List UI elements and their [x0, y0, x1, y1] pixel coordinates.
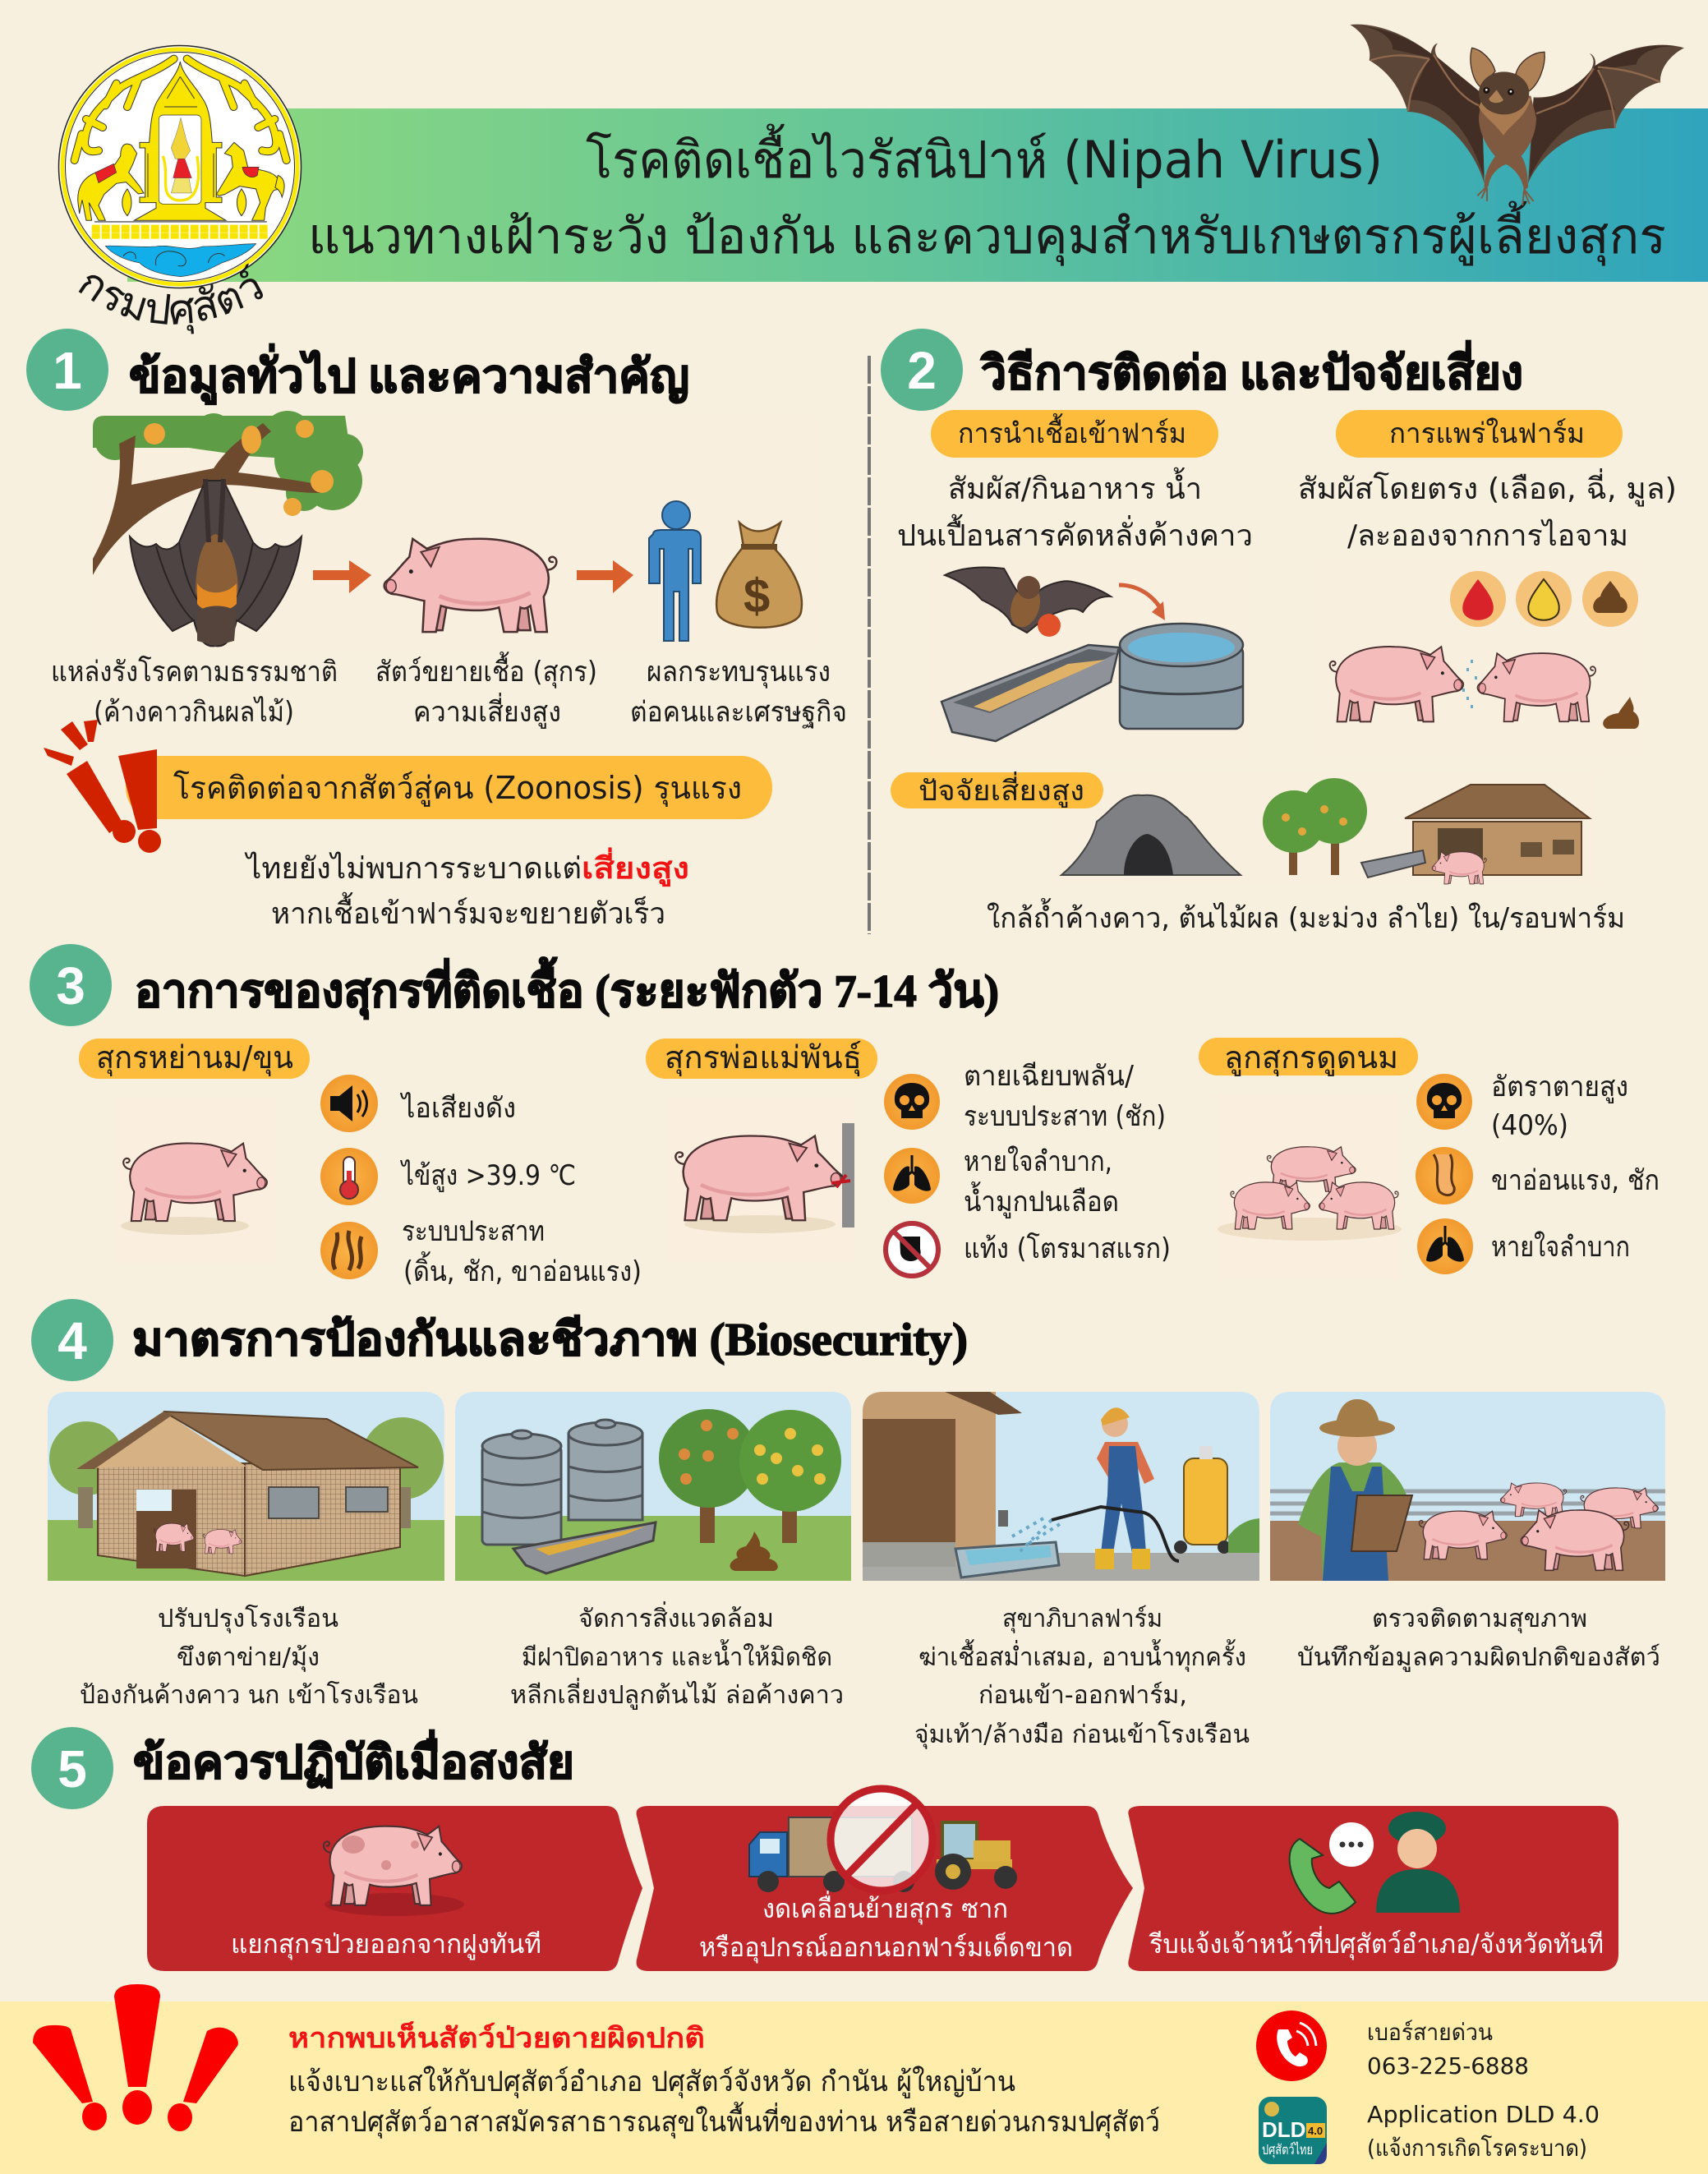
icon: red exclamation marks	[44, 720, 161, 853]
symptom list: ระบบประสาท (ชัก)	[964, 1100, 1166, 1133]
icon: thermometer	[320, 1148, 378, 1205]
icon: DLD 4.0 app	[1259, 2097, 1327, 2164]
section 2 heading: วิธีการติดต่อ และปัจจัยเสี่ยง	[980, 340, 1523, 399]
step text	[699, 1891, 1073, 1964]
captions: biosecurity measures: ขึงตาข่าย/มุ้ง	[177, 1643, 320, 1673]
title line 2: แนวทางเฝ้าระวัง ป้องกัน และควบคุมสำหรับเกษตรกรผู้เลี้ยงสุกร	[308, 200, 1666, 266]
icon: officer	[1376, 1812, 1460, 1913]
symptom list	[964, 1060, 1171, 1265]
pig right	[1478, 653, 1595, 721]
text block: introduction routes: ปนเปื้อนสารคัดหลั่งค้างคาว	[897, 514, 1253, 553]
alert body	[288, 2066, 1160, 2139]
symptom list: ไข้สูง >39.9 ℃	[399, 1159, 576, 1192]
captions: transmission chain: สัตว์ขยายเชื้อ (สุกร)	[375, 652, 597, 689]
app text: Application DLD 4.0	[1367, 2101, 1600, 2128]
panel: weaned and fattening pigs	[79, 1039, 642, 1288]
section 2 number badge: 2	[907, 341, 937, 400]
section 3 number badge: 3	[56, 956, 85, 1016]
symptom list: (40%)	[1491, 1109, 1568, 1142]
icon: no pregnancy	[886, 1223, 938, 1276]
alert body: อาสาปศุสัตว์อาสาสมัครสาธารณสุขในพื้นที่ของท่าน หรือสายด่วนกรมปศุสัตว์	[288, 2102, 1160, 2139]
icon: feces	[1582, 571, 1638, 627]
arrow	[577, 560, 633, 593]
header band	[127, 108, 1708, 282]
icon: DLD 4.0 app: DLD	[1262, 2117, 1305, 2142]
symptom list: ขาอ่อนแรง, ชัก	[1491, 1164, 1660, 1197]
section 4 heading: มาตรการป้องกันและชีวภาพ (Biosecurity)	[132, 1315, 968, 1366]
title line 1: โรคติดเชื้อไวรัสนิปาห์ (Nipah Virus)	[586, 123, 1383, 190]
alert body: แจ้งเบาะแสให้กับปศุสัตว์อำเภอ ปศุสัตว์จังหวัด กำนัน ผู้ใหญ่บ้าน	[288, 2066, 1015, 2098]
hotline text: 063-225-6888	[1367, 2052, 1529, 2080]
captions: transmission chain: ผลกระทบรุนแรง	[647, 656, 831, 689]
text block: risk status: เสี่ยงสูง	[582, 847, 689, 887]
bat	[945, 567, 1111, 637]
icon: exclamation marks	[33, 1984, 238, 2131]
symptom list: หายใจลำบาก,	[964, 1145, 1112, 1178]
fruit trees	[1263, 778, 1367, 875]
section 4 number badge	[31, 1299, 113, 1381]
icon: person	[649, 501, 701, 641]
icon: money bag: $	[744, 569, 770, 623]
icon: money bag	[716, 523, 802, 628]
captions: transmission chain: แหล่งรังโรคตามธรรมชาติ	[51, 656, 338, 689]
label pill: spread in farm	[1336, 410, 1623, 458]
icon: speaker	[320, 1075, 378, 1132]
farm house	[1405, 785, 1590, 875]
text block: risk locations: ใกล้ถ้ำค้างคาว, ต้นไม้ผล (มะม่วง ลำไย) ใน/รอบฟาร์ม	[987, 898, 1625, 935]
icon: phone	[1290, 1839, 1356, 1914]
icon: truck	[749, 1817, 914, 1892]
text block: risk status: หากเชื้อเข้าฟาร์มจะขยายตัวเร็ว	[271, 891, 665, 931]
sprayer tank	[1174, 1446, 1231, 1554]
icon: urine drop	[1516, 571, 1572, 627]
icon: skull	[1416, 1074, 1472, 1130]
icon: prohibition sign	[831, 1789, 932, 1891]
captions: biosecurity measures: สุขาภิบาลฟาร์ม	[1002, 1605, 1162, 1634]
fruit trees	[659, 1409, 841, 1543]
icon: blood drop	[1450, 571, 1506, 627]
symptom list	[1491, 1071, 1660, 1264]
captions: biosecurity measures	[80, 1601, 1660, 1750]
captions: biosecurity measures: ป้องกันค้างคาว นก เข้าโรงเรือน	[80, 1680, 418, 1710]
icon: sick pig	[324, 1826, 464, 1916]
label pill: สุกรพ่อแม่พันธุ์	[665, 1039, 862, 1076]
symptom list: แท้ง (โตรมาสแรก)	[964, 1232, 1171, 1265]
icon: pig	[384, 539, 556, 632]
text block: introduction routes	[897, 467, 1253, 553]
step text: รีบแจ้งเจ้าหน้าที่ปศุสัตว์อำเภอ/จังหวัดทันที	[1149, 1926, 1604, 1960]
tree with fruit	[93, 411, 363, 575]
icon: lungs	[1417, 1218, 1473, 1274]
captions: biosecurity measures: ปรับปรุงโรงเรือน	[158, 1604, 338, 1634]
label pill: introduction into farm: การนำเชื้อเข้าฟาร์ม	[958, 413, 1186, 450]
icon: DLD 4.0 app: ปศุสัตว์ไทย	[1262, 2141, 1313, 2158]
captions: biosecurity measures: หลีกเลี่ยงปลูกต้นไม้ ล่อค้างคาว	[510, 1678, 844, 1710]
symptom list: อัตราตายสูง	[1491, 1071, 1628, 1103]
icon: pig	[123, 1143, 267, 1221]
house	[76, 1412, 418, 1576]
building and door	[863, 1392, 1022, 1567]
wall	[842, 1123, 854, 1227]
label pill: สุกรหย่านม/ขุน	[96, 1039, 293, 1076]
illustration: bat contaminating feed and water	[927, 557, 1253, 758]
illustration: cave, fruit trees and farm	[1054, 771, 1598, 885]
alert heading: หากพบเห็นสัตว์ป่วยตายผิดปกติ	[288, 2020, 705, 2055]
captions: biosecurity measures: จุ่มเท้า/ล้างมือ ก่อนเข้าโรงเรือน	[914, 1720, 1250, 1750]
covered tanks	[482, 1420, 642, 1545]
section 3 number badge	[30, 944, 112, 1026]
worker with sprayer	[1052, 1407, 1179, 1569]
icon: sow with nasal bleeding	[675, 1135, 850, 1220]
section 1 heading: ข้อมูลทั่วไป และความสำคัญ	[129, 343, 689, 405]
foot bath	[955, 1542, 1059, 1578]
icon: hotline phone	[1256, 2010, 1327, 2081]
icon: lungs	[884, 1148, 940, 1204]
text block: risk status: ไทยยังไม่พบการระบาดแต่	[244, 851, 582, 886]
captions: transmission chain	[51, 652, 847, 729]
captions: transmission chain: ความเสี่ยงสูง	[413, 693, 561, 729]
section 1 number badge: 1	[53, 341, 82, 400]
captions: biosecurity measures: ตรวจติดตามสุขภาพ	[1372, 1605, 1587, 1634]
section 5 number badge: 5	[58, 1739, 87, 1799]
symptom list: ระบบประสาท	[402, 1215, 545, 1248]
captions: biosecurity measures: จัดการสิ่งแวดล้อม	[578, 1601, 774, 1633]
symptom list: ไอเสียงดัง	[399, 1092, 516, 1125]
symptom list: น้ำมูกปนเลือด	[964, 1181, 1119, 1218]
panel: suckling piglets	[1199, 1038, 1660, 1280]
text block: spread routes	[1298, 468, 1677, 553]
icon: nervous signs	[320, 1222, 378, 1279]
captions: transmission chain: (ค้างคาวกินผลไม้)	[94, 696, 294, 729]
icon: DLD 4.0 app: 4.0	[1308, 2125, 1323, 2137]
farmer	[1298, 1399, 1412, 1581]
water tank	[1120, 624, 1243, 729]
hotline text: เบอร์สายด่วน	[1367, 2019, 1493, 2046]
step 2: stop movement	[637, 1789, 1133, 1971]
label pill: spread in farm: การแพร่ในฟาร์ม	[1389, 417, 1585, 450]
section 3 heading: อาการของสุกรที่ติดเชื้อ (ระยะฟักตัว 7-14 วัน)	[135, 957, 999, 1020]
cave	[1061, 795, 1241, 875]
app text: (แจ้งการเกิดโรคระบาด)	[1367, 2135, 1587, 2162]
icon: hanging fruit bat	[130, 479, 302, 646]
app text	[1367, 2101, 1600, 2162]
step 3: notify officials	[1128, 1806, 1618, 1971]
text block: risk status	[244, 847, 689, 931]
icon: piglets	[1231, 1147, 1398, 1229]
panel: breeding pigs	[646, 1039, 1171, 1276]
captions: biosecurity measures: ก่อนเข้า-ออกฟาร์ม,	[978, 1681, 1187, 1710]
label pill: high risk factors	[891, 771, 1103, 808]
section 4 number badge: 4	[58, 1311, 87, 1370]
label pill: introduction into farm	[931, 410, 1218, 458]
icon: flying bat	[1350, 25, 1684, 205]
section 5 heading: ข้อควรปฏิบัติเมื่อสงสัย	[133, 1730, 574, 1789]
step 1: isolate sick pigs	[147, 1806, 642, 1971]
symptom list	[399, 1092, 642, 1288]
feed trough	[513, 1522, 656, 1573]
arrow	[1119, 585, 1165, 620]
step text: แยกสุกรป่วยออกจากฝูงทันที	[231, 1928, 541, 1960]
step text: งดเคลื่อนย้ายสุกร ซาก	[762, 1891, 1008, 1925]
section 2 number badge	[881, 329, 963, 411]
logo: department seal	[58, 44, 302, 334]
logo caption	[76, 273, 300, 324]
trough and pig	[1361, 850, 1486, 884]
panel: transmission chain illustration	[93, 411, 820, 650]
captions: biosecurity measures: มีฝาปิดอาหาร และน้ำให้มิดชิด	[522, 1639, 832, 1672]
text block: spread routes: /ละอองจากการไอจาม	[1347, 518, 1628, 553]
card: housing	[48, 1392, 444, 1581]
icon: skull	[884, 1074, 940, 1130]
label pill: high risk factors: ปัจจัยเสี่ยงสูง	[918, 771, 1084, 808]
pig left	[1330, 647, 1463, 721]
icon: speech bubble	[1329, 1822, 1374, 1867]
illustration: pig to pig spread	[1314, 557, 1641, 754]
card: farm sanitation	[863, 1392, 1259, 1581]
section 1 number badge	[26, 329, 108, 411]
icon: tractor	[935, 1822, 1017, 1890]
captions: transmission chain: ต่อคนและเศรษฐกิจ	[630, 696, 847, 729]
card: environment	[455, 1392, 851, 1581]
text block: spread routes: สัมผัสโดยตรง (เลือด, ฉี่, มูล)	[1298, 468, 1677, 507]
captions: biosecurity measures: บันทึกข้อมูลความผิดปกติของสัตว์	[1297, 1643, 1660, 1672]
spray	[1012, 1518, 1060, 1553]
callout: zoonosis	[44, 720, 772, 853]
feed trough	[941, 645, 1119, 741]
footer panel	[0, 1984, 1708, 2174]
text block: introduction routes: สัมผัส/กินอาหาร น้ำ	[948, 467, 1202, 506]
section 5 number badge	[31, 1727, 113, 1809]
logo: department seal: กรมปศุสัตว์	[79, 263, 263, 334]
hotline text	[1367, 2019, 1529, 2080]
symptom list: หายใจลำบาก	[1491, 1231, 1630, 1264]
arrow	[313, 560, 371, 593]
symptom list: ตายเฉียบพลัน/	[964, 1060, 1135, 1093]
droplets	[1462, 661, 1477, 707]
step text: หรืออุปกรณ์ออกนอกฟาร์มเด็ดขาด	[699, 1932, 1073, 1964]
feces	[730, 1531, 778, 1571]
pigs	[1419, 1483, 1658, 1570]
feces	[1603, 697, 1639, 729]
icon: weak leg	[1416, 1147, 1473, 1204]
card: health monitoring	[1270, 1392, 1665, 1581]
label pill: ลูกสุกรดูดนม	[1224, 1039, 1398, 1076]
symptom list: (ดิ้น, ชัก, ขาอ่อนแรง)	[403, 1251, 642, 1288]
callout text: โรคติดต่อจากสัตว์สู่คน (Zoonosis) รุนแรง	[173, 770, 742, 807]
captions: biosecurity measures: ฆ่าเชื้อสม่ำเสมอ, อาบน้ำทุกครั้ง	[918, 1639, 1246, 1673]
